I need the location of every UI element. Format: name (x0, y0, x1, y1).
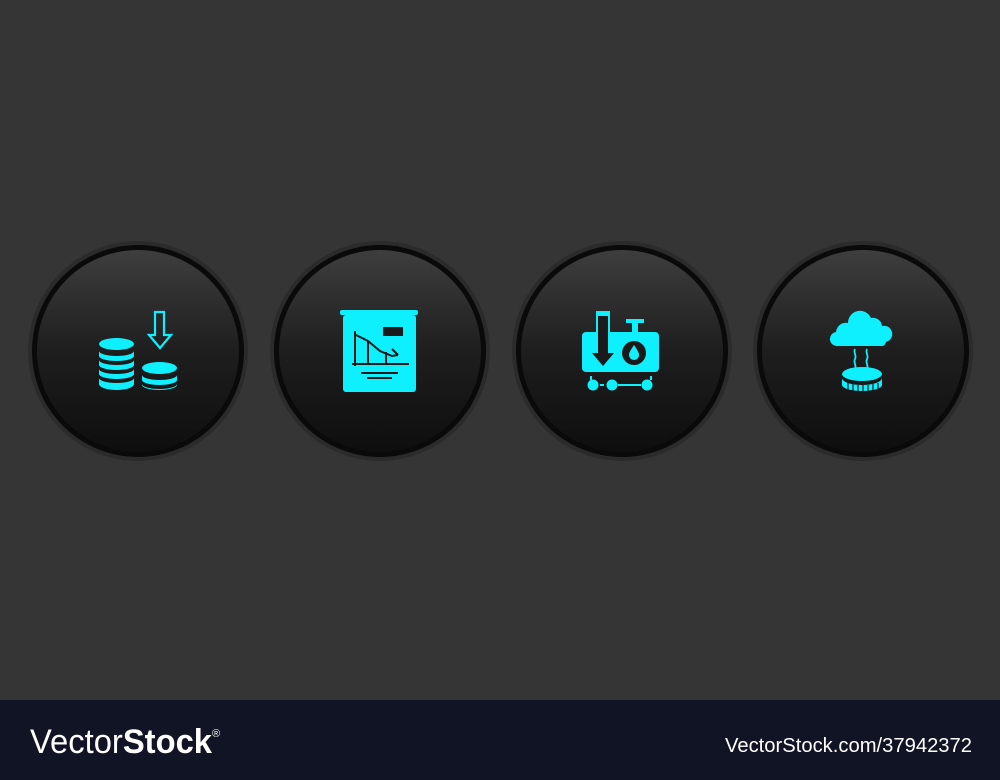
button 1: coins down (28, 241, 248, 461)
icon: coins with down arrow (99, 312, 177, 390)
icon: oil tank with arrow (582, 311, 659, 390)
icon: chart board (340, 310, 418, 392)
button 4: cloud coin (753, 241, 973, 461)
logo text: VectorStock (30, 723, 212, 761)
button 3: oil tank (512, 241, 732, 461)
footer bar: ® (212, 728, 220, 740)
icon: cloud over coin (830, 311, 892, 392)
button 2: presentation board (270, 241, 490, 461)
footer bar (0, 700, 1000, 780)
url text: VectorStock.com/37942372 (725, 735, 972, 757)
